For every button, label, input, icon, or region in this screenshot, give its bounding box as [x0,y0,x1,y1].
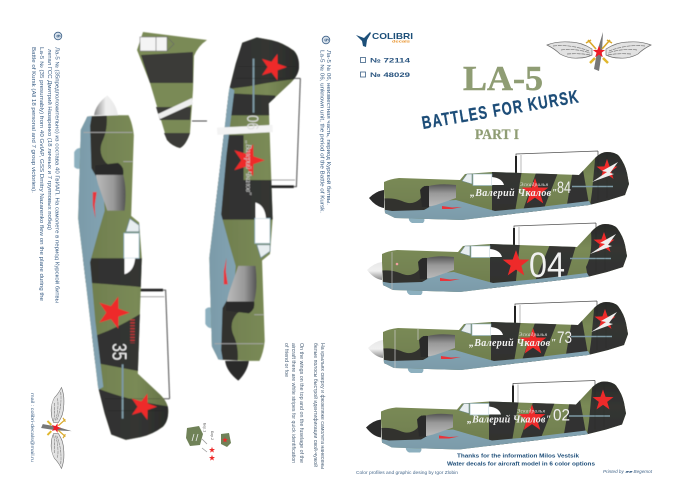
insignia details: side 1 and side 2 [186,423,231,461]
insignia details: side 1 and side 2: Бор.2 [210,431,214,440]
subtitle: Part I: PART I [475,127,519,143]
credits: Color profiles and graphic desing by Igor Zlobin [356,470,458,476]
contact email: mail : colibri-decals@mail.ru [29,393,35,462]
aircraft profile 1: No. 84: 84 [557,178,571,197]
text block: aircraft 5 description: La-5 № 06, unknown unit, the period of the Battle of Kursk. [318,50,324,213]
marker: number 6: 6 [54,34,60,38]
icon: colibri bird [356,32,371,47]
marker: number 5 [322,36,330,44]
credits: Water decals for aircraft model in 6 color options [447,462,595,468]
text block: aircraft 5 description [318,36,332,213]
logo: Colibri decals: decals [392,40,410,44]
aircraft profile 3: No. 73: 73 [557,328,572,347]
aircraft profile 3: No. 73: Эскадрилья [519,333,548,338]
aircraft profile 2: No. 04: 04 [529,246,565,285]
text block: aircraft 6 description: Ла-5 № (35предположительно) из состава 40 ГвИАП. На самолете в период Курской битвы [54,47,60,303]
marker: number 5: 5 [322,38,328,42]
text block: aircraft 5 description: Ла-5 № 06, неизвестная часть, период Курской битвы. [325,50,332,205]
marker: number 6 [54,32,62,40]
text block: wing stripes note: белые полосы быстрой идентификации свой-чужой [312,343,319,467]
aircraft profile 4: No. 02: Эскадрилья [517,410,546,414]
aircraft profile 3: No. 73: „Валерий Чкалов" [469,338,556,349]
text block: aircraft 6 description: Battle of Kursk (All 18 personal and 7 group victories). [30,47,36,193]
credits: Printed by ▰▰ Begemot [603,469,653,474]
catalog numbers [360,58,411,79]
logo: Colibri decals: COLIBRI [372,31,413,41]
aircraft profile 2: No. 04 [367,222,633,297]
aircraft side view rotated: No. 06 [203,30,302,381]
aircraft side view rotated: No. 35: 35 [108,343,130,360]
aircraft profile 4: No. 02 [366,380,632,454]
text block: aircraft 6 description [30,32,62,303]
aircraft profile 1: No. 84 [369,150,635,225]
text block: wing stripes note [283,343,325,469]
text block: wing stripes note: На крыльях сверху и фюзеляже самолета нанесены [319,343,325,469]
text block: wing stripes note: aircraft there are white stripes for quick identification [290,343,296,463]
aircraft side view rotated: No. 35 [72,95,171,448]
subtitle: Battles for Kursk: BATTLES FOR KURSK [420,88,580,134]
credits: Thanks for the information Milos Vestsik [457,454,580,460]
wing top view with white stripes [137,32,207,148]
insignia details: side 1 and side 2: Бор.1 [202,423,206,432]
text block: aircraft 6 description: La-5 № (35 presumably) from 40 GvIAP, GSS Dmitry Nazarenko flew on the plane during the [38,47,44,301]
emblem: winged star (right) [547,32,651,71]
aircraft profile 1: No. 84: „Валерий Чкалов" [470,188,557,199]
emblem: winged star (left, rotated) [41,387,72,469]
logo: Colibri decals [356,31,413,47]
text block: wing stripes note: On the wings on the top and on the fuselage of the [298,343,304,463]
aircraft profile 4: No. 02: 02 [553,406,570,424]
text block: wing stripes note: of friend or foe [283,343,289,377]
aircraft profile 4: No. 02: „Валерий Чкалов" [467,414,551,426]
aircraft side view rotated: No. 06: „Валерий Чкалов" [244,140,253,196]
catalog numbers: № 48029 [370,72,411,79]
credits [356,454,653,476]
aircraft profile 3: No. 73 [368,300,634,375]
catalog numbers: № 72114 [370,58,411,64]
aircraft side view rotated: No. 06: 06 [243,115,262,130]
title: LA-5: LA-5 [463,59,543,98]
aircraft profile 1: No. 84: Эскадрилья [520,183,549,188]
text block: aircraft 6 description: летал ГСС Дмитрий Назаренко (18 личных и 7 групповых побед) [46,49,53,230]
